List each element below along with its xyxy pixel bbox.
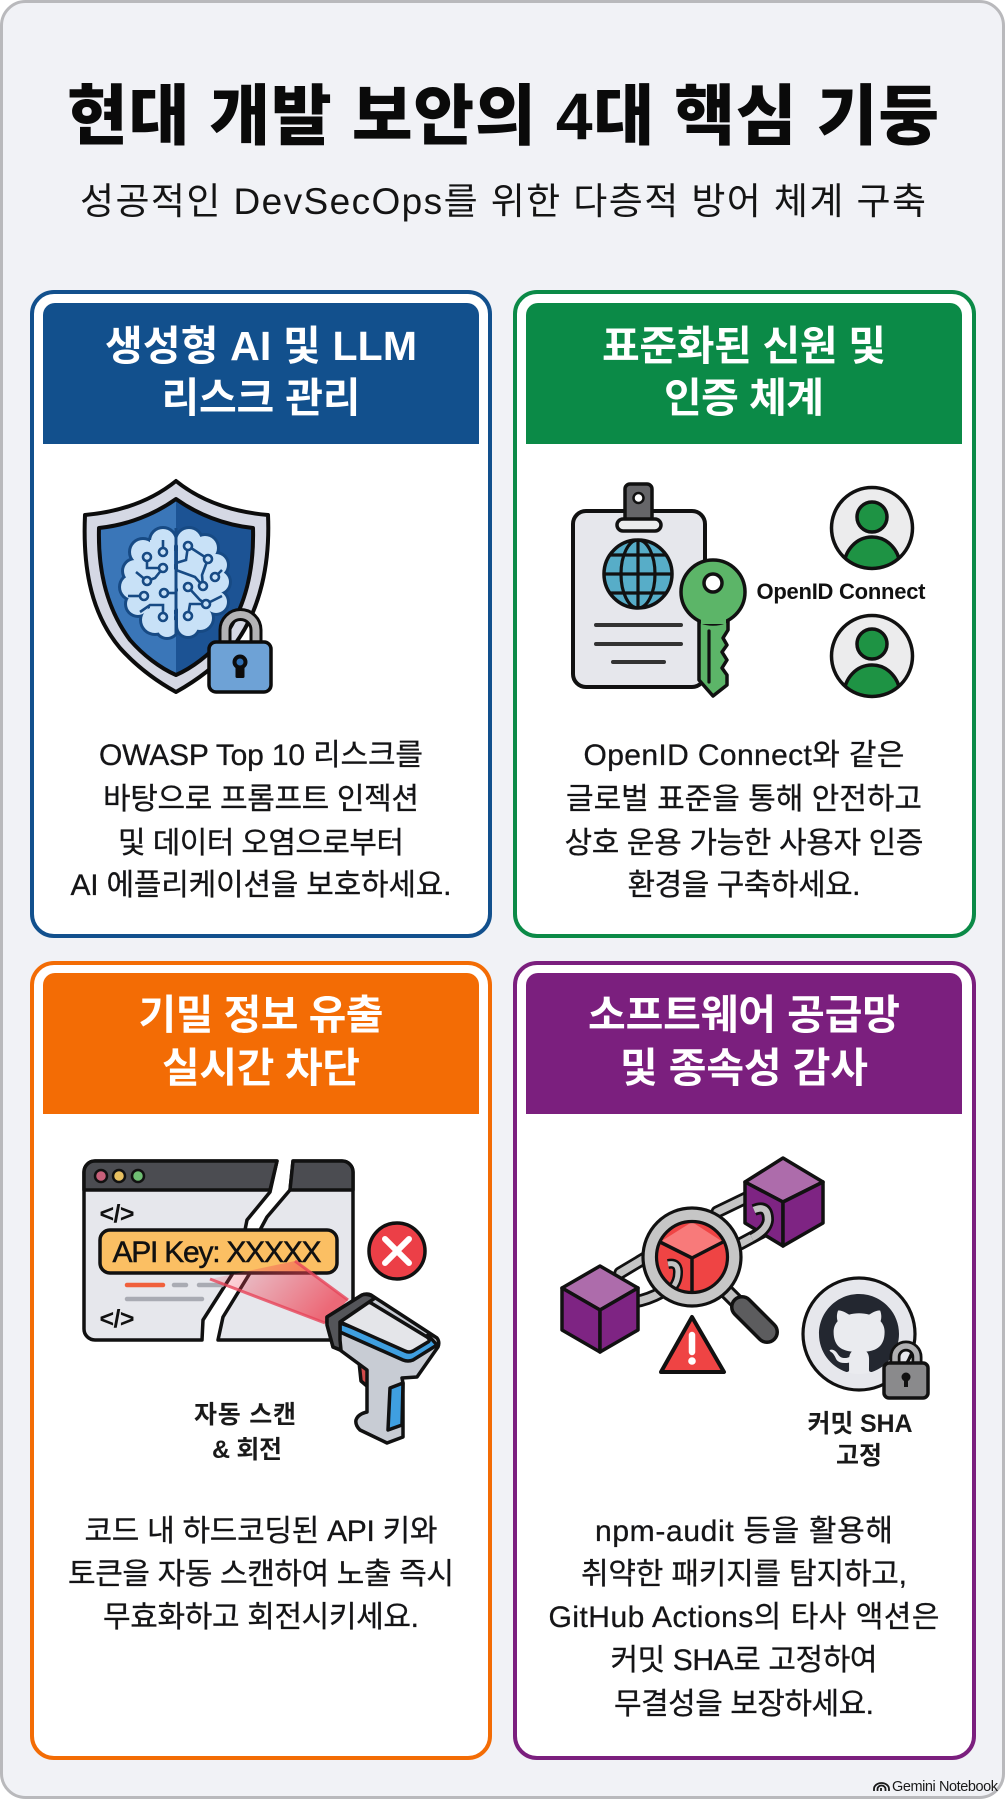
label: pinned commit SHA: 커밋 SHA [808, 1410, 912, 1438]
panel: generative AI and LLM risk [32, 292, 490, 936]
text block: panel 4 description [548, 1515, 940, 1721]
icon: magnifier over red cube [643, 1208, 767, 1332]
panel: real-time secret leak blocking [32, 963, 490, 1758]
icon: broken code window [84, 1161, 353, 1340]
text block: panel 2 description: 상호 운용 가능한 사용자 인증 [564, 827, 924, 860]
heading: panel 1: 생성형 AI 및 LLM [105, 323, 417, 369]
label: OpenID Connect: OpenID Connect [756, 579, 926, 604]
heading: panel 3 [43, 973, 479, 1114]
text block: panel 4 description: 무결성을 보장하세요. [614, 1688, 874, 1721]
icon: user avatar bottom [830, 614, 914, 698]
icon: purple cube right [745, 1158, 823, 1246]
heading: panel 3: 실시간 차단 [162, 1045, 360, 1091]
icon: ID badge with globe and key [573, 484, 745, 696]
heading: panel 4 [526, 973, 962, 1114]
text block: panel 4 description: 취약한 패키지를 탐지하고, [581, 1558, 907, 1591]
text block: panel 1 description [70, 739, 452, 902]
subtitle: 성공적인 DevSecOps를 위한 다층적 방어 체계 구축 [80, 181, 926, 222]
icon: red X alert [369, 1223, 425, 1279]
heading: panel 4: 및 종속성 감사 [620, 1045, 868, 1091]
label: automatic scan and rotation: 자동 스캔 [194, 1401, 296, 1429]
text block: panel 4 description: GitHub Actions의 타사 액션은 [548, 1601, 940, 1634]
icon: broken code window: </> [100, 1200, 134, 1228]
icon: GitHub circle with lock [803, 1278, 928, 1398]
text block: panel 3 description [68, 1515, 454, 1634]
label: automatic scan and rotation [194, 1401, 296, 1464]
text block: panel 3 description: 코드 내 하드코딩된 API 키와 [84, 1515, 438, 1548]
icon: barcode scanner [327, 1294, 439, 1443]
icon: broken code window: API Key: XXXXX [112, 1236, 322, 1269]
icon: purple cube left [562, 1266, 638, 1352]
text block: panel 2 description: 글로벌 표준을 통해 안전하고 [566, 783, 922, 816]
icon: chain links [620, 1198, 768, 1302]
icon: broken code window: </> [100, 1305, 134, 1333]
text block: panel 1 description: 바탕으로 프롬프트 인젝션 [103, 783, 419, 816]
heading: panel 2 [526, 303, 962, 444]
text block: panel 3 description: 토큰을 자동 스캔하여 노출 즉시 [68, 1558, 454, 1591]
heading: panel 1: 리스크 관리 [162, 375, 360, 421]
label: pinned commit SHA: 고정 [836, 1442, 882, 1470]
text block: panel 2 description: OpenID Connect와 같은 [584, 739, 904, 772]
heading: panel 3: 기밀 정보 유출 [138, 992, 384, 1038]
text block: panel 1 description: OWASP Top 10 리스크를 [99, 739, 423, 772]
text block: panel 2 description [564, 739, 924, 902]
label: pinned commit SHA [808, 1410, 912, 1470]
brand mark: Gemini Notebook: Gemini Notebook [892, 1779, 999, 1795]
icon: warning triangle [661, 1317, 724, 1372]
panel: standardized trust and authentication [515, 292, 974, 936]
title: 현대 개발 보안의 4대 핵심 기둥 [67, 79, 939, 153]
text block: panel 2 description: 환경을 구축하세요. [628, 869, 860, 902]
icon: user avatar top [830, 486, 914, 570]
label: automatic scan and rotation: & 회전 [212, 1436, 282, 1464]
text block: panel 4 description: npm-audit 등을 활용해 [595, 1515, 893, 1548]
heading: panel 1 [43, 303, 479, 444]
text block: panel 4 description: 커밋 SHA로 고정하여 [610, 1644, 878, 1677]
heading: panel 4: 소프트웨어 공급망 [588, 992, 900, 1038]
panel: software supply chain audit [515, 963, 974, 1758]
icon: shield with brain and lock [85, 481, 271, 692]
heading: panel 2: 표준화된 신원 및 [602, 323, 886, 369]
text block: panel 3 description: 무효화하고 회전시키세요. [103, 1601, 419, 1634]
heading: panel 2: 인증 체계 [664, 375, 824, 421]
text block: panel 1 description: 및 데이터 오염으로부터 [118, 827, 404, 860]
text block: panel 1 description: AI 에플리케이션을 보호하세요. [70, 869, 452, 902]
